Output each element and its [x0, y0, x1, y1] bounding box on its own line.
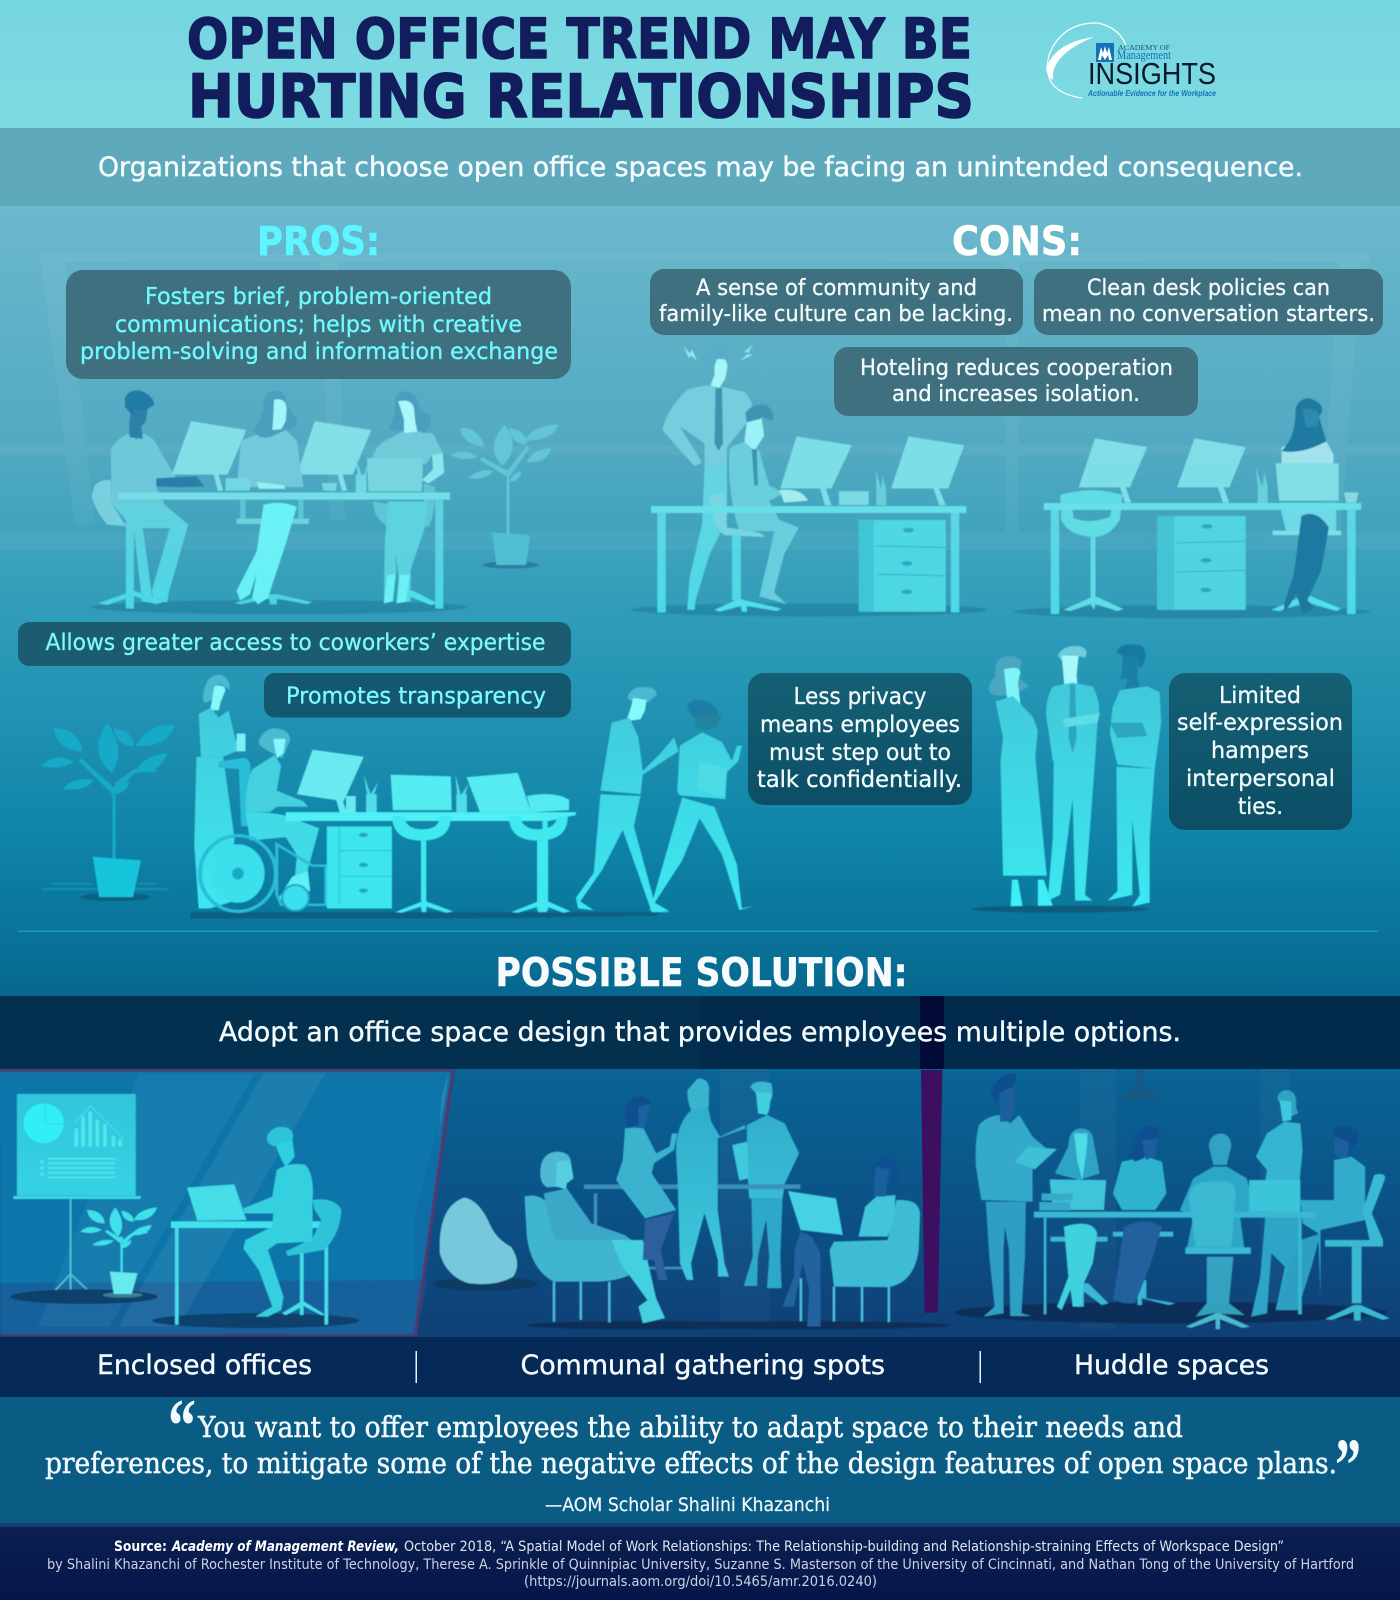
- scene: communal gathering spots: [433, 1096, 759, 1329]
- plant: lower left: [42, 723, 175, 901]
- enclosed office glass panel: [0, 1071, 453, 1335]
- drawers: [1157, 516, 1246, 610]
- panel: cons callout clean desk: [1034, 269, 1383, 335]
- logo: Academy of Management Insights: Management: [1117, 47, 1171, 62]
- column: [921, 1070, 942, 1313]
- scene: walker 2 and colleagues: [650, 644, 1161, 913]
- woman sitting on table: [616, 1096, 678, 1280]
- shadow: [972, 906, 1149, 913]
- labels band: Enclosed offices: [97, 1350, 312, 1381]
- subtitle band: [0, 128, 1400, 206]
- scene: huddle spaces: [954, 1050, 1390, 1329]
- stools: [392, 816, 570, 913]
- panel: cons callout privacy: Less privacy: [794, 684, 926, 710]
- panel: cons callout clean desk: Clean desk policies can: [1087, 276, 1330, 301]
- seated woman with laptop: [655, 1157, 950, 1329]
- presentation board: [13, 1094, 141, 1296]
- solution illustration background: [0, 1069, 1400, 1337]
- walker 1: [576, 687, 679, 912]
- woman with laptop: [1039, 1128, 1106, 1310]
- walker 2: [650, 700, 754, 911]
- monitors: [172, 421, 371, 491]
- panel: cons callout privacy: talk confidentially.: [757, 767, 962, 793]
- desk: [1044, 503, 1361, 614]
- quote band: —AOM Scholar Shalini Khazanchi: [545, 1494, 830, 1516]
- wheelchair user and chair: [200, 728, 326, 911]
- logo: Academy of Management Insights: ACADEMY OF: [1118, 44, 1170, 52]
- tall woman: [676, 1100, 746, 1280]
- panel: pros callout 1: communications; helps with creative: [115, 312, 522, 338]
- title: HURTING RELATIONSHIPS: [188, 62, 974, 132]
- table chairs back: [1050, 1232, 1173, 1307]
- source footer: Academy of Management Review,: [171, 1539, 399, 1555]
- labels band: Communal gathering spots: [520, 1350, 885, 1381]
- laptop and desk: [171, 1184, 329, 1325]
- person 3: [367, 391, 444, 605]
- panel: pros callout 1: problem-solving and information exchange: [80, 339, 558, 365]
- logo: Academy of Management Insights: Actionable Evidence for the Workplace: [1087, 89, 1216, 98]
- panel: cons callout self-expression: interpersonal: [1186, 766, 1335, 792]
- bearded man: [1276, 1126, 1365, 1310]
- heading: PROS: PROS:: [257, 219, 380, 265]
- office chair right: [1325, 1174, 1390, 1321]
- panel: cons callout self-expression: Limited: [1219, 683, 1301, 709]
- scene: communal right: [655, 1078, 950, 1329]
- standing man with clipboard: [976, 1073, 1057, 1317]
- laptops: [391, 773, 569, 812]
- panel: pros callout transparency: Promotes transparency: [286, 684, 546, 710]
- scene: cons desk with stressed manager: [631, 345, 987, 616]
- person 1: [92, 390, 204, 603]
- man with glasses: [732, 1081, 799, 1288]
- person 2: [234, 391, 312, 604]
- panel: pros callout expertise: [18, 622, 571, 666]
- labels band: Huddle spaces: [1074, 1350, 1269, 1381]
- lamp: [1116, 1050, 1162, 1101]
- seated employee: [710, 405, 808, 612]
- title: OPEN OFFICE TREND MAY BE: [187, 7, 972, 71]
- panel: cons callout community: A sense of community and: [696, 276, 977, 301]
- ground: [191, 912, 661, 919]
- panel: cons callout hoteling: [834, 347, 1198, 416]
- panel: pros callout transparency: [264, 673, 571, 718]
- panel: pros callout 1: [66, 270, 571, 379]
- desk: [651, 436, 966, 612]
- high table edge: [718, 1184, 800, 1189]
- background: faint window frame: [0, 254, 1400, 550]
- standing woman with cup: [1249, 1090, 1303, 1317]
- quote band: [0, 1384, 1400, 1527]
- panel: cons callout self-expression: hampers: [1211, 738, 1309, 764]
- logo: Academy of Management Insights: INSIGHTS: [1088, 56, 1216, 91]
- seated man: [243, 1127, 341, 1317]
- woman in long dress: [989, 656, 1054, 908]
- scene: wheelchair desk: [191, 675, 679, 919]
- huddle table: [1034, 1212, 1315, 1314]
- manager: [662, 345, 753, 610]
- heading: CONS: CONS:: [952, 219, 1082, 265]
- quote band: “: [168, 1384, 196, 1468]
- scene: pros desk with three colleagues: [91, 390, 467, 614]
- floor shadow: [954, 1302, 1387, 1323]
- quote band: ”: [1335, 1424, 1361, 1508]
- desk items: [225, 457, 368, 492]
- labels band: [0, 1337, 1400, 1397]
- monitors: [1079, 438, 1359, 503]
- shadow: [91, 600, 467, 614]
- bean bag: [433, 1197, 537, 1291]
- solution band: Adopt an office space design that provides employees multiple options.: [219, 1017, 1181, 1048]
- scene: cons empty desk with seated woman: [1014, 398, 1370, 618]
- man from behind: [1180, 1133, 1256, 1329]
- solution band: [0, 996, 1400, 1069]
- panel: cons callout hoteling: and increases isolation.: [892, 382, 1140, 407]
- panel: pros callout expertise: Allows greater access to coworkers’ expertise: [46, 630, 546, 656]
- panel: cons callout privacy: means employees: [760, 712, 960, 738]
- panel: cons callout community: [650, 269, 1023, 335]
- background: faint beams: [720, 1069, 1290, 1329]
- source footer: (https://journals.aom.org/doi/10.5465/amr.2016.0240): [524, 1574, 877, 1590]
- panel: cons callout clean desk: mean no conversation starters.: [1042, 302, 1375, 327]
- panel: cons callout community: family-like culture can be lacking.: [659, 302, 1013, 327]
- source footer: [0, 1527, 1400, 1600]
- panel: cons callout self-expression: ties.: [1238, 794, 1283, 820]
- panel: cons callout self-expression: self-expression: [1177, 710, 1343, 736]
- woman head: [687, 1078, 709, 1110]
- drawers: [859, 520, 946, 612]
- panel: pros callout 1: Fosters brief, problem-oriented: [145, 284, 492, 310]
- header band: [0, 0, 1400, 128]
- standing woman: [194, 675, 246, 909]
- monitor and desk items: [297, 750, 469, 814]
- panel: cons callout privacy: must step out to: [769, 740, 951, 766]
- title: [187, 7, 974, 132]
- logo: Academy of Management Insights: [1046, 23, 1216, 98]
- drawers: [327, 826, 392, 909]
- shadow: [1014, 605, 1370, 618]
- woman with dark hair: [1113, 1125, 1175, 1305]
- panel: cons callout hoteling: Hoteling reduces cooperation: [860, 356, 1173, 381]
- seated woman: [1272, 398, 1341, 614]
- armchair woman: [525, 1152, 665, 1323]
- desk: [286, 812, 576, 821]
- high table: [584, 1184, 687, 1269]
- man with tie: [1046, 646, 1100, 901]
- heading: possible solution: POSSIBLE SOLUTION:: [496, 951, 908, 996]
- source footer: Source:: [114, 1539, 167, 1555]
- quote band: You want to offer employees the ability to adapt space to their needs and: [197, 1410, 1183, 1444]
- bearded man: [1107, 644, 1161, 906]
- source footer: October 2018, “A Spatial Model of Work Relationships: The Relationship-building and Relationship-straining Effects of Workspace Design”: [404, 1539, 1284, 1555]
- panel: cons callout self-expression: [1169, 673, 1352, 830]
- panel: cons callout privacy: [748, 673, 972, 805]
- shadow: [631, 603, 987, 616]
- subtitle band: Organizations that choose open office spaces may be facing an unintended consequence.: [98, 152, 1303, 183]
- shadows: [10, 1289, 158, 1304]
- plant: pros top: [451, 425, 558, 569]
- main background: [0, 206, 1400, 997]
- desk: [98, 492, 450, 609]
- chair: [1060, 490, 1123, 611]
- office plant: [80, 1207, 157, 1294]
